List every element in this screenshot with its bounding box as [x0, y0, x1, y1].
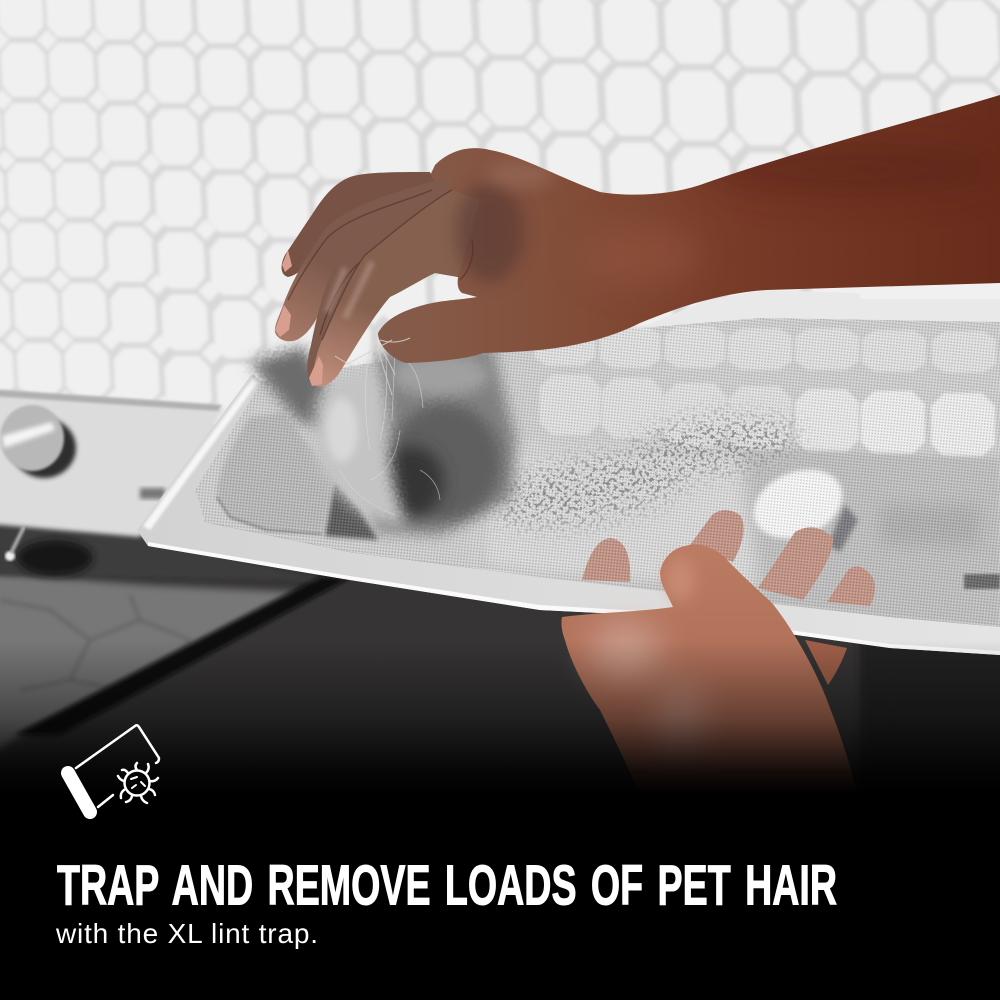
light curled tuft: [314, 368, 406, 526]
ring finger: [275, 178, 455, 341]
dark shadow wedge: [325, 482, 378, 540]
knuckle highlights: [327, 262, 372, 318]
loose hair strands: [340, 335, 440, 515]
left mesh pocket: [217, 413, 335, 532]
top-left fur: [250, 346, 332, 430]
frame rails: [137, 374, 1000, 655]
glare disc: [743, 457, 853, 551]
wall octagons seen through mesh: [535, 324, 996, 457]
loose hairs on thumb: [335, 335, 410, 395]
lower hand: [561, 545, 857, 795]
pet hair lint: [250, 335, 802, 539]
far fingertip: [805, 640, 847, 685]
dark core: [389, 404, 501, 520]
frame top band: [640, 290, 1000, 328]
upper pale lint: [390, 353, 490, 397]
lower dark cabinet and lid: [0, 520, 1000, 810]
back of hand and forearm: [378, 95, 1000, 363]
little finger: [282, 172, 440, 277]
fingernails: [275, 250, 323, 386]
middle finger: [307, 215, 420, 381]
hand shading: [456, 142, 1000, 285]
fade to black: [0, 640, 1000, 795]
lint trap screen: [137, 285, 1000, 655]
tiled wall: [0, 0, 1000, 598]
scattered dust: [486, 408, 802, 539]
icon: lint trap with bug: [68, 725, 159, 812]
fingers behind mesh: [582, 510, 875, 606]
index finger: [313, 190, 480, 387]
subheading: with the XL lint trap.: [55, 918, 318, 949]
mesh weave: [195, 315, 1000, 627]
mesh base: [195, 315, 1000, 627]
palm and thumb: [561, 545, 857, 795]
bottom caption band: [0, 725, 1000, 1000]
mid gray lint mass: [365, 346, 516, 535]
lower washer drum seen through mesh: [480, 450, 1000, 627]
finger creases: [288, 190, 473, 340]
upper hand and arm: [275, 95, 1000, 395]
washer console with knob: [0, 389, 225, 537]
